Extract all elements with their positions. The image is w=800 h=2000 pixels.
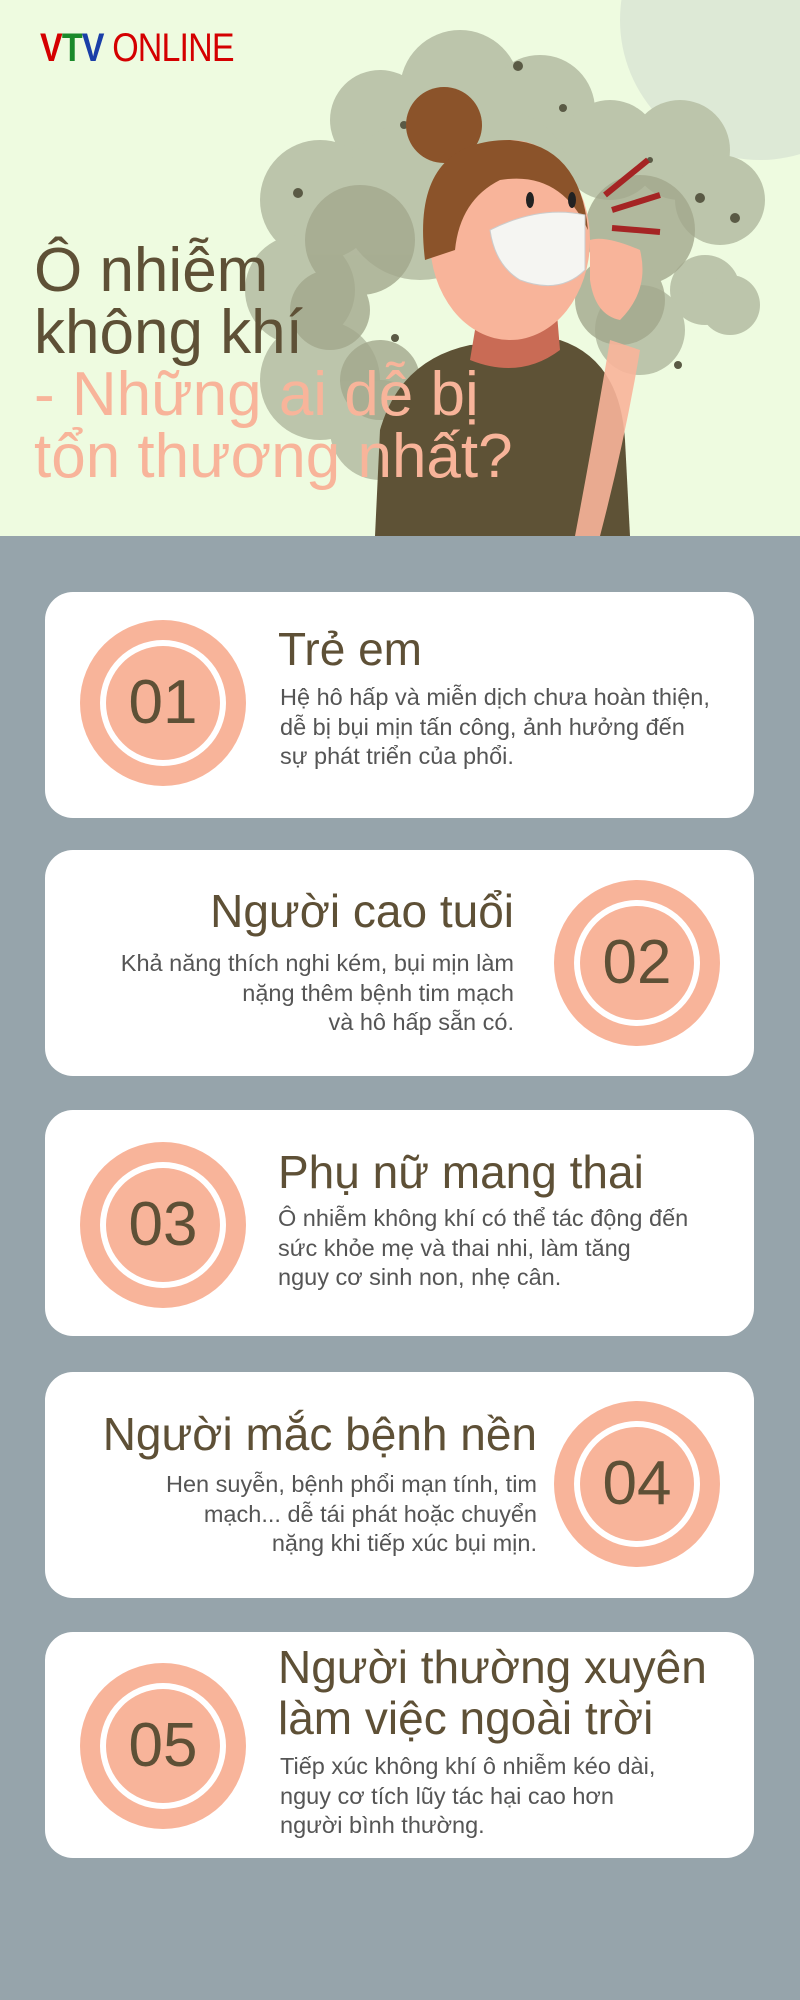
arm xyxy=(575,340,640,536)
hand xyxy=(590,239,642,320)
card 01: Trẻ em xyxy=(45,592,754,818)
heading: Người thường xuyên xyxy=(278,1641,707,1693)
title: không khí xyxy=(34,298,303,367)
description xyxy=(166,1471,537,1556)
heading: Trẻ em xyxy=(278,623,422,675)
number badge 01: 01 xyxy=(129,668,197,737)
shirt xyxy=(375,340,630,536)
number badge 01 xyxy=(80,620,246,786)
heading: Phụ nữ mang thai xyxy=(278,1146,644,1198)
number badge 04: 04 xyxy=(603,1449,671,1518)
description: Hen suyễn, bệnh phổi mạn tính, tim xyxy=(166,1471,537,1497)
heading: Người cao tuổi xyxy=(210,885,514,937)
description: người bình thường. xyxy=(280,1812,485,1838)
description: nguy cơ tích lũy tác hại cao hơn xyxy=(280,1782,614,1808)
card 05: Người thường xuyên làm việc ngoài trời xyxy=(45,1632,754,1858)
description: nặng thêm bệnh tim mạch xyxy=(242,980,514,1006)
description xyxy=(280,684,710,769)
description: Tiếp xúc không khí ô nhiễm kéo dài, xyxy=(280,1753,655,1779)
description: mạch... dễ tái phát hoặc chuyển xyxy=(204,1500,537,1526)
number badge 05: 05 xyxy=(129,1711,197,1780)
card 02: Người cao tuổi xyxy=(45,850,754,1076)
logo: VTV ONLINE xyxy=(40,26,234,70)
description xyxy=(278,1205,688,1290)
number badge 03: 03 xyxy=(129,1190,197,1259)
description: Khả năng thích nghi kém, bụi mịn làm xyxy=(121,950,514,976)
cough lines xyxy=(605,160,660,232)
description xyxy=(121,950,514,1035)
number badge 03 xyxy=(80,1142,246,1308)
heading: làm việc ngoài trời xyxy=(278,1692,653,1744)
heading xyxy=(278,1641,707,1744)
description xyxy=(280,1753,655,1838)
face xyxy=(430,140,590,340)
number badge 04 xyxy=(554,1401,720,1567)
description: Hệ hô hấp và miễn dịch chưa hoàn thiện, xyxy=(280,684,710,710)
description: sự phát triển của phổi. xyxy=(280,743,514,769)
description: và hô hấp sẵn có. xyxy=(328,1009,514,1035)
description: sức khỏe mẹ và thai nhi, làm tăng xyxy=(278,1234,631,1260)
eyes xyxy=(526,192,534,208)
mask xyxy=(490,212,585,286)
hair bun xyxy=(406,87,482,163)
number badge 05 xyxy=(80,1663,246,1829)
description: Ô nhiễm không khí có thể tác động đến xyxy=(278,1205,688,1231)
number badge 02 xyxy=(554,880,720,1046)
neck xyxy=(470,290,560,368)
title xyxy=(34,236,513,491)
header panel xyxy=(0,0,800,536)
hair xyxy=(423,140,588,260)
title: Ô nhiễm xyxy=(34,236,268,305)
illustration: woman in smoke xyxy=(245,0,800,536)
title: - Những ai dễ bị xyxy=(34,360,479,429)
card 03: Phụ nữ mang thai xyxy=(45,1110,754,1336)
card 04: Người mắc bệnh nền xyxy=(45,1372,754,1598)
description: nguy cơ sinh non, nhẹ cân. xyxy=(278,1264,561,1290)
heading: Người mắc bệnh nền xyxy=(103,1408,537,1460)
description: dễ bị bụi mịn tấn công, ảnh hưởng đến xyxy=(280,714,685,740)
number badge 02: 02 xyxy=(603,928,671,997)
title: tổn thương nhất? xyxy=(34,422,513,491)
description: nặng khi tiếp xúc bụi mịn. xyxy=(272,1530,537,1556)
